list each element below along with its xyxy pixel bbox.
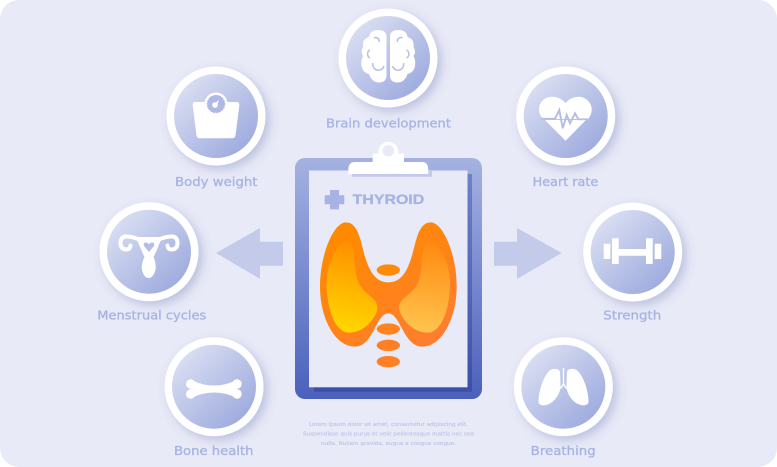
item: breathing xyxy=(514,337,613,458)
label: Breathing xyxy=(531,443,596,458)
thyroid left inner lobe xyxy=(327,241,378,333)
thyroid outer lobes xyxy=(320,222,457,347)
menstrual circle xyxy=(100,202,198,301)
icon: uterus xyxy=(120,236,178,278)
item: menstrual cycles xyxy=(97,202,206,322)
strength circle xyxy=(583,202,682,302)
upper ellipse xyxy=(377,264,400,276)
body text: Suspendisse quis purus et velit pellentesque mattis nec sed xyxy=(303,432,474,438)
icon: heart xyxy=(539,97,592,141)
clipboard xyxy=(295,142,482,399)
label: Menstrual cycles xyxy=(97,307,206,322)
bone circle xyxy=(164,337,264,436)
weight circle xyxy=(166,66,266,166)
label: Strength xyxy=(603,307,661,322)
label: Heart rate xyxy=(533,174,599,189)
clip xyxy=(348,142,428,174)
icon: medical cross xyxy=(325,190,344,209)
clipboard heading: THYROID xyxy=(353,191,424,207)
clip shadow xyxy=(352,170,432,177)
icon: scale xyxy=(193,92,239,138)
item: bone health xyxy=(164,337,264,458)
lower ellipse 1 xyxy=(377,323,400,335)
item: body weight xyxy=(166,66,266,189)
thyroid right inner lobe xyxy=(399,241,450,333)
icon: brain xyxy=(361,30,415,83)
lower ellipse 2 xyxy=(377,340,400,351)
paper shadow xyxy=(314,174,472,392)
arrow: left xyxy=(216,228,283,279)
body text: nulla. Nullam gravida, augue a congue congue. xyxy=(321,441,456,447)
breathing circle xyxy=(514,337,613,436)
arrow: right xyxy=(494,228,562,279)
thyroid illustration xyxy=(320,222,457,367)
label: Body weight xyxy=(175,174,258,189)
icon: lungs xyxy=(538,368,589,405)
icon: bone xyxy=(186,379,242,399)
body text xyxy=(303,422,474,447)
label: Bone health xyxy=(174,443,254,458)
lower ellipse 3 xyxy=(377,356,400,367)
brain circle xyxy=(338,8,438,108)
label: Brain development xyxy=(326,116,451,130)
item: brain development xyxy=(326,8,451,130)
icon: dumbbell xyxy=(604,238,661,264)
clipboard board xyxy=(295,158,482,399)
item: heart rate xyxy=(516,66,615,189)
body text: Lorem ipsum dolor sit amet, consectetur adipiscing elit. xyxy=(309,422,468,428)
item: strength xyxy=(583,202,682,322)
paper xyxy=(309,170,468,387)
heart circle xyxy=(516,66,615,166)
